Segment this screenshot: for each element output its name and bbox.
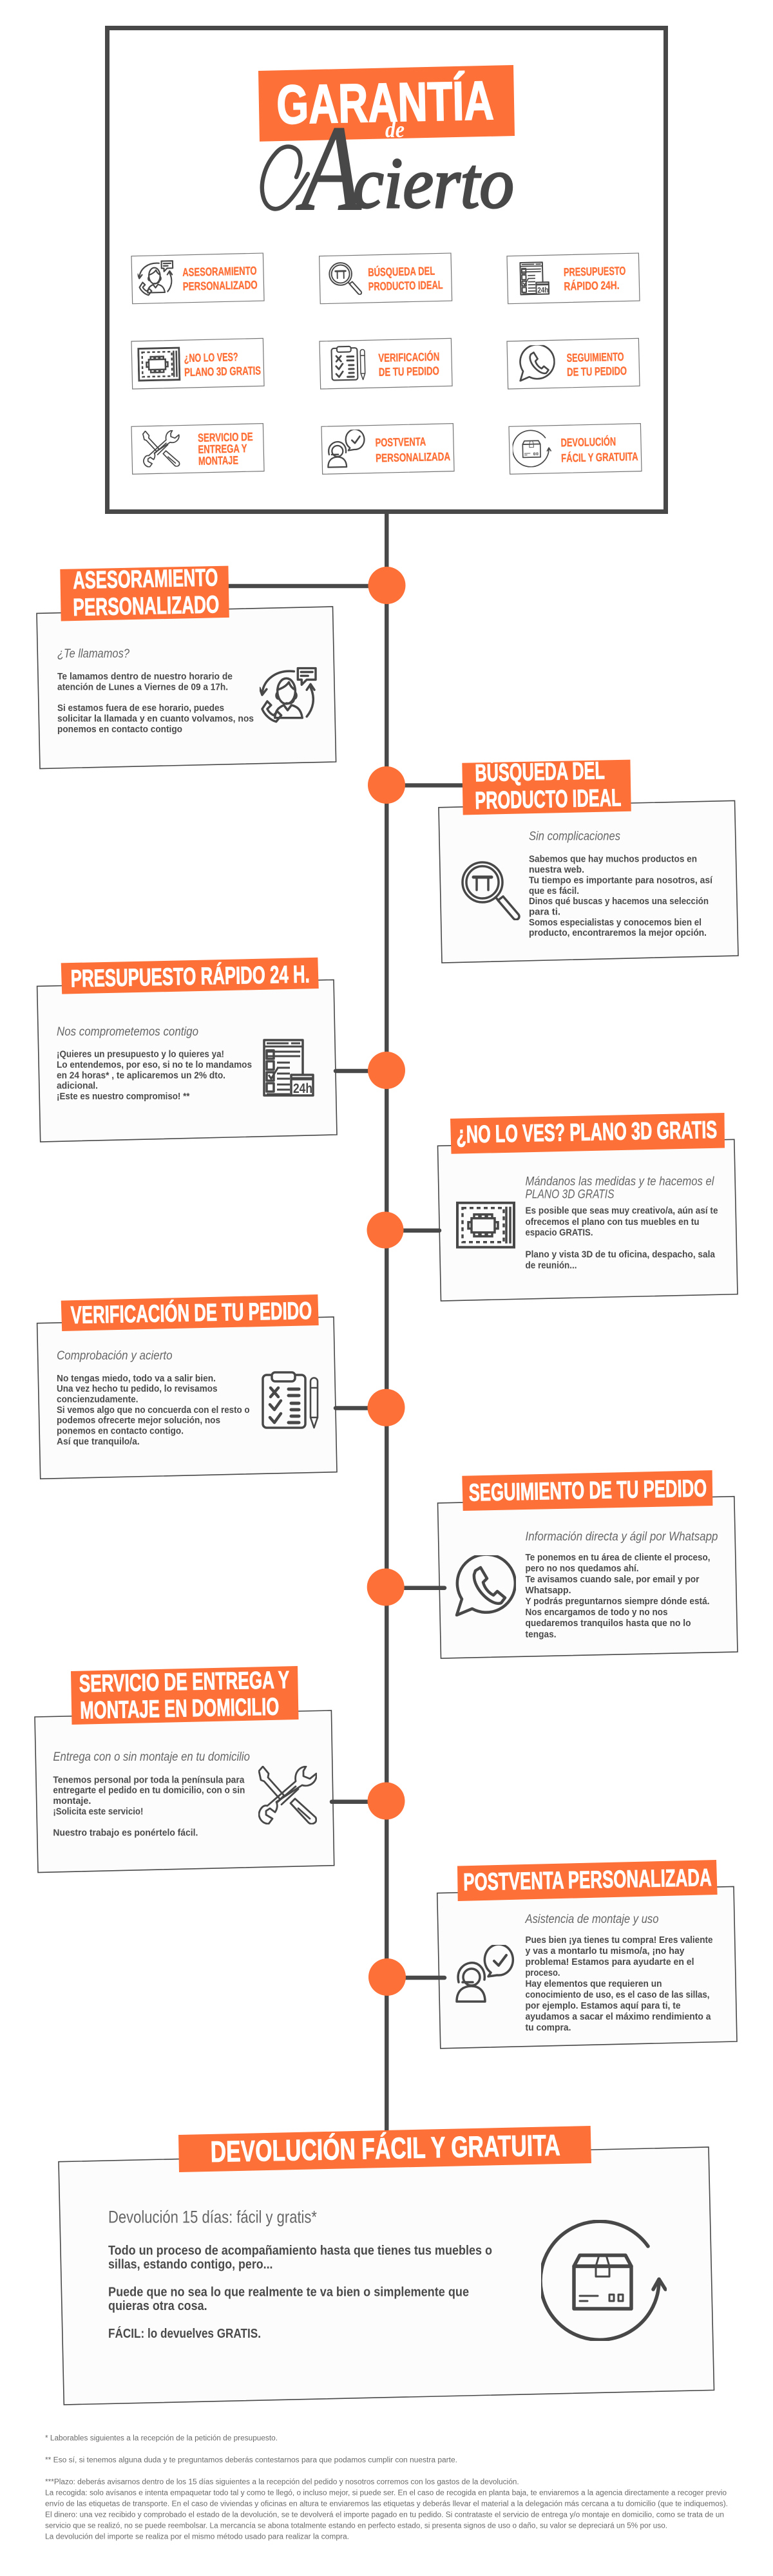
body text: ponemos en contacto contigo.	[57, 1426, 184, 1436]
body text: espacio GRATIS.	[526, 1227, 593, 1238]
body text	[526, 1935, 712, 2033]
body text	[53, 1774, 245, 1838]
timeline node	[368, 567, 406, 604]
connector	[386, 783, 464, 788]
icon: checklist	[263, 1372, 318, 1428]
decorative swash	[262, 147, 308, 209]
body text: No tengas miedo, todo va a salir bien.	[57, 1373, 216, 1384]
subtitle: Devolución 15 días: fácil y gratis*	[108, 2208, 317, 2227]
banner	[457, 1860, 718, 1901]
subtitle: Nos comprometemos contigo	[57, 1025, 198, 1039]
banner	[61, 1294, 319, 1331]
subtitle	[526, 1175, 714, 1202]
body text: Es posible que seas muy creativo/a, aún así te	[526, 1206, 718, 1217]
timeline node	[368, 1052, 405, 1089]
timeline node	[367, 1389, 405, 1426]
body text: tu compra.	[526, 2022, 571, 2033]
body text: Te ponemos en tu área de cliente el proceso,	[526, 1552, 710, 1563]
banner	[462, 1470, 712, 1511]
subtitle: PLANO 3D GRATIS	[526, 1188, 615, 1202]
body text: ¡Solicita este servicio!	[53, 1806, 143, 1817]
header frame	[107, 28, 666, 511]
footnotes: servicio que se realizó, no se puede reembolsar. La mercancía se abona totalmente estando en perfecto estado, si presenta signos de uso o daño, su valor se depreciará un 5% por uso.	[45, 2522, 667, 2530]
body text: Y podrás preguntarnos siempre dónde está.	[526, 1596, 710, 1607]
banner	[450, 1113, 725, 1154]
body text: Tu tiempo es importante para nosotros, así	[529, 875, 713, 886]
summary card: postventa: PERSONALIZADA	[376, 450, 450, 464]
body text: en 24 horas* , te aplicaremos un 2% dto.	[57, 1070, 225, 1081]
body text: atención de Lunes a Viernes de 09 a 17h.	[57, 682, 228, 693]
subtitle: Mándanos las medidas y te hacemos el	[526, 1175, 714, 1189]
summary card: servicio: SERVICIO DE	[198, 430, 253, 444]
banner	[60, 566, 229, 621]
summary card: busqueda	[320, 253, 452, 304]
body text	[526, 1206, 718, 1271]
panel: verificacion de tu pedido	[37, 1294, 405, 1479]
body text	[108, 2244, 492, 2341]
summary card: asesoramiento: ASESORAMIENTO	[182, 264, 257, 279]
body text: Así que tranquilo/a.	[57, 1436, 140, 1447]
title word: Acierto: cierto	[353, 144, 514, 223]
body text: quieras otra cosa.	[108, 2299, 207, 2313]
heading: PRODUCTO IDEAL	[475, 784, 622, 815]
summary card: asesoramiento	[131, 253, 264, 304]
body text: ponemos en contacto contigo	[57, 724, 182, 735]
body text: ofrecemos el plano con tus muebles en tu	[526, 1217, 700, 1227]
heading: SERVICIO DE ENTREGA Y	[79, 1667, 290, 1698]
title word: Garantía: GARANTÍA	[276, 70, 494, 136]
body text: Si estamos fuera de ese horario, puedes	[57, 703, 224, 714]
body text: FÁCIL: lo devuelves GRATIS.	[108, 2326, 261, 2341]
summary card: devolucion	[509, 424, 642, 474]
body text: problema! Estamos para ayudarte en el	[526, 1956, 694, 1967]
summary card: servicio	[131, 424, 264, 474]
subtitle: ¿Te llamamos?	[57, 647, 129, 661]
connector	[332, 1800, 386, 1804]
summary card: busqueda: BÚSQUEDA DEL	[368, 264, 435, 279]
icon: budget list	[264, 1040, 313, 1096]
body text: pero no nos quedamos ahí.	[526, 1563, 639, 1574]
body text: proceso.	[526, 1967, 560, 1978]
footnotes: * Laborables siguientes a la recepción de la petición de presupuesto.	[45, 2434, 278, 2442]
connector	[385, 1228, 439, 1233]
body text: para ti.	[529, 907, 560, 918]
body text: Lo entendemos, por eso, si no te lo mandamos	[57, 1059, 252, 1070]
heading: ASESORAMIENTO	[73, 564, 218, 594]
summary card: presupuesto	[507, 253, 640, 304]
subtitle: Entrega con o sin montaje en tu domicilio	[53, 1750, 250, 1764]
body text: podemos ofrecerte mejor solución, nos	[57, 1415, 220, 1426]
body text: Whatsapp.	[526, 1585, 571, 1596]
icon: return box	[540, 2221, 665, 2340]
icon: after-sales person	[457, 1944, 513, 2002]
timeline node	[368, 766, 405, 804]
panel: plano 3d gratis	[367, 1113, 738, 1301]
body text: Somos especialistas y conocemos bien el	[529, 917, 701, 928]
summary card: postventa: POSTVENTA	[375, 435, 426, 449]
heading: MONTAJE EN DOMICILIO	[80, 1694, 280, 1725]
title word: Acierto	[262, 101, 514, 236]
icon: magnifier	[463, 862, 519, 920]
icon: tools	[259, 1766, 316, 1824]
timeline node	[367, 1783, 405, 1820]
connector	[386, 1976, 444, 1980]
banner	[61, 958, 319, 994]
body text: y vas a montarlo tu mismo/a, ¡no hay	[526, 1946, 685, 1956]
body text: Te lamamos dentro de nuestro horario de	[57, 671, 233, 682]
connector	[225, 584, 386, 588]
summary card: devolucion: FÁCIL Y GRATUITA	[561, 450, 638, 464]
body text: Todo un proceso de acompañamiento hasta que tienes tus muebles o	[108, 2244, 492, 2258]
body text: Tenemos personal por toda la península para	[53, 1774, 245, 1785]
panel: seguimiento de tu pedido	[367, 1470, 738, 1658]
connector	[336, 1406, 386, 1410]
body text	[526, 1552, 710, 1640]
summary card: presupuesto: PRESUPUESTO	[564, 265, 626, 279]
body text	[57, 1373, 250, 1447]
footnotes	[45, 2434, 728, 2541]
summary card: verificacion: DE TU PEDIDO	[379, 365, 439, 379]
heading: BÚSQUEDA DEL	[475, 756, 605, 787]
title word: de: de	[385, 117, 405, 142]
footnotes: La devolución del importe se realiza por el mismo método usado para realizar la compra.	[45, 2533, 349, 2541]
summary card: servicio: ENTREGA Y	[198, 442, 247, 456]
banner	[178, 2126, 591, 2172]
body text: Dinos qué buscas y hacemos una selección	[529, 896, 709, 907]
body text: Puede que no sea lo que realmente te va bien o simplemente que	[108, 2286, 469, 2300]
icon: whatsapp	[457, 1555, 515, 1615]
summary card: servicio: MONTAJE	[198, 454, 238, 468]
summary card: seguimiento: DE TU PEDIDO	[567, 365, 627, 379]
body text: concienzudamente.	[57, 1394, 138, 1405]
panel: servicio de entrega y montaje	[35, 1666, 405, 1873]
summary card: presupuesto: RÁPIDO 24H.	[564, 278, 620, 293]
body text: solicitar la llamada y en cuanto volvamos, nos	[57, 714, 254, 724]
subtitle: Información directa y ágil por Whatsapp	[526, 1530, 718, 1544]
summary card: plano 3d: ¿NO LO VES?	[184, 350, 238, 365]
body text: tengas.	[526, 1629, 557, 1640]
banner	[462, 760, 631, 815]
body text: Si vemos algo que no concuerda con el resto o	[57, 1405, 250, 1416]
summary card: plano 3d	[131, 338, 264, 389]
body text: Plano y vista 3D de tu oficina, despacho, sala	[526, 1249, 716, 1260]
body text: Nos encargamos de todo y no nos	[526, 1607, 667, 1618]
heading	[73, 564, 220, 621]
body text: ayudamos a sacar el máximo rendimiento a	[526, 2011, 711, 2022]
body text: conocimiento de uso, es el caso de las sillas,	[526, 1989, 710, 2000]
body text: entregarte el pedido en tu domicilio, con o sin	[53, 1785, 245, 1796]
footnotes: La recogida: solo avísanos e intenta empaquetar todo tal y como te llegó, o incluso mejor, si puede ser. En el caso de recogida en planta baja, te enviaremos a la agencia directamente a recoger previo	[45, 2489, 727, 2497]
connector	[336, 1069, 386, 1073]
subtitle: Sin complicaciones	[529, 829, 620, 844]
summary card: verificacion: VERIFICACIÓN	[378, 350, 440, 365]
footnotes: ** Eso sí, si tenemos alguna duda y te preguntamos deberás contestarnos para que podamos cumplir con nuestra parte.	[45, 2456, 457, 2464]
body text: Nuestro trabajo es ponértelo fácil.	[53, 1827, 198, 1838]
connector	[386, 1586, 444, 1590]
summary card: busqueda: PRODUCTO IDEAL	[368, 278, 443, 293]
heading: PRESUPUESTO RÁPIDO 24 H.	[70, 960, 310, 992]
body text: producto, encontraremos la mejor opción.	[529, 927, 707, 938]
summary card: seguimiento: SEGUIMIENTO	[566, 350, 624, 365]
summary card: devolucion: DEVOLUCIÓN	[560, 435, 616, 449]
heading: PERSONALIZADO	[73, 591, 220, 621]
body text: adicional.	[57, 1081, 98, 1092]
title word: Acierto: A	[296, 101, 362, 236]
body text: quedaremos tranquilos hasta que no lo	[526, 1618, 691, 1629]
timeline node	[367, 1569, 405, 1606]
footnotes: ***Plazo: deberás avisarnos dentro de los 15 días siguientes a la recepción del pedido y nosotros corremos con los gastos de la devolución.	[45, 2478, 519, 2486]
panel: presupuesto rapido	[37, 958, 405, 1142]
summary card: verificacion	[320, 338, 452, 389]
body text	[529, 854, 713, 938]
body text: Una vez hecho tu pedido, lo revisamos	[57, 1383, 218, 1394]
body text	[57, 671, 254, 735]
heading	[475, 756, 622, 815]
timeline spine	[385, 514, 389, 2137]
body text: ¡Quieres un presupuesto y lo quieres ya!	[57, 1048, 224, 1059]
summary card: postventa	[321, 424, 454, 474]
summary card: asesoramiento: PERSONALIZADO	[182, 278, 258, 293]
body text: Te avisamos cuando sale, por email y por	[526, 1574, 700, 1585]
banner	[71, 1666, 299, 1725]
footnotes: envío de las etiquetas de transporte. En el caso de viviendas y oficinas en altura te enviaremos las etiquetas y deberás llevar el material a la delegación más cercana a tu domicilio (que te indiquemos).	[45, 2500, 728, 2508]
body text: Pues bien ¡ya tienes tu compra! Eres valiente	[526, 1935, 712, 1946]
subtitle: Comprobación y acierto	[57, 1349, 173, 1363]
title logo	[258, 65, 515, 236]
body text: de reunión...	[526, 1260, 577, 1271]
body text: que es fácil.	[529, 886, 579, 896]
timeline node	[368, 1958, 406, 1996]
timeline node	[367, 1212, 403, 1248]
panel: busqueda del producto ideal	[368, 756, 738, 963]
body text: por ejemplo. Estamos aquí para ti, te	[526, 2000, 680, 2011]
subtitle: Asistencia de montaje y uso	[525, 1913, 658, 1926]
body text: Sabemos que hay muchos productos en	[529, 854, 697, 865]
icon: agent	[260, 668, 316, 722]
body text: Hay elementos que requieren un	[526, 1978, 662, 1989]
body text: sillas, estando contigo, pero...	[108, 2258, 273, 2272]
panel: devolucion facil y gratuita	[59, 2126, 714, 2405]
heading: DEVOLUCIÓN FÁCIL Y GRATUITA	[210, 2128, 560, 2168]
icon: floor plan	[457, 1203, 514, 1247]
body text: nuestra web.	[529, 864, 584, 875]
body text	[57, 1048, 252, 1102]
heading: VERIFICACIÓN DE TU PEDIDO	[70, 1296, 312, 1329]
footnotes: El dinero: una vez recibido y comprobado el estado de la devolución, se te devolverá el importe pagado en tu pedido. Si contrataste el servicio de entrega y/o montaje en domicilio, como se trata de un	[45, 2511, 724, 2519]
panel: asesoramiento personalizado	[37, 564, 406, 769]
body text: ¡Este es nuestro compromiso! **	[57, 1091, 190, 1102]
summary card: seguimiento	[507, 338, 640, 389]
body text: montaje.	[53, 1795, 91, 1806]
heading	[79, 1667, 290, 1725]
panel: postventa personalizada	[368, 1860, 737, 2049]
summary card: plano 3d: PLANO 3D GRATIS	[184, 364, 261, 379]
